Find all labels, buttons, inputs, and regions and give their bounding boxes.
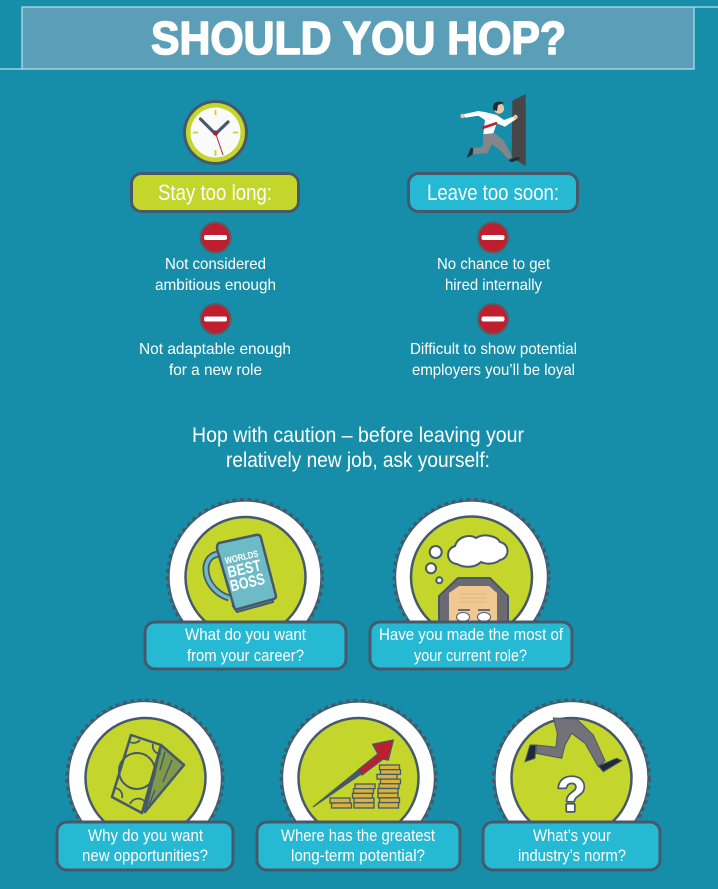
question box: current role: Have you made the most of xyxy=(379,625,563,644)
icon: thought cloud xyxy=(426,535,508,583)
icon: question mark: ? xyxy=(557,769,586,822)
question box: career: What do you want xyxy=(185,625,306,644)
label: stay too long: Stay too long: xyxy=(158,180,272,205)
icon: coin stacks xyxy=(330,765,400,808)
text: no chance: No chance to get xyxy=(437,256,551,273)
text: difficult to show xyxy=(410,341,577,379)
question box: new opportunities: Why do you want xyxy=(88,826,203,845)
heading: hop with caution: relatively new job, ask yourself: xyxy=(226,449,490,472)
icon: minus sign 1 xyxy=(200,222,230,252)
icon: banknotes xyxy=(112,735,184,813)
heading: hop with caution xyxy=(192,424,524,472)
text: no chance xyxy=(437,256,551,294)
icon: thinking head xyxy=(439,578,508,625)
badge: career xyxy=(168,500,322,654)
badge: long-term potential xyxy=(281,700,436,856)
question box: career xyxy=(145,622,346,669)
question box: current role xyxy=(370,622,572,669)
text: difficult to show: employers you’ll be loyal xyxy=(412,362,575,379)
text: no chance: hired internally xyxy=(445,277,542,294)
label: stay too long xyxy=(132,174,298,212)
text: not adaptable: Not adaptable enough xyxy=(139,341,291,358)
icon: rising arrow xyxy=(313,740,393,807)
text: not adaptable: for a new role xyxy=(169,362,262,379)
icon: clock xyxy=(184,102,246,164)
question box: long-term potential xyxy=(257,822,460,870)
badge: industry norm xyxy=(494,700,650,856)
heading: hop with caution: Hop with caution – before leaving your xyxy=(192,424,524,447)
icon: mug: WORLDS xyxy=(224,549,260,567)
question box: current role: your current role? xyxy=(414,646,527,665)
question box: long-term potential: Where has the greatest xyxy=(281,826,435,845)
text: difficult to show: Difficult to show potential xyxy=(410,341,577,358)
badge: new opportunities xyxy=(67,700,223,856)
icon: mug: BEST xyxy=(226,557,263,582)
badge: current role xyxy=(394,500,549,654)
label: leave too soon xyxy=(408,174,578,212)
icon: man running through door xyxy=(460,94,526,166)
icon: mug: BOSS xyxy=(229,571,267,595)
icon: minus sign 4 xyxy=(478,304,508,334)
text: not considered ambitious xyxy=(155,256,276,294)
question box: new opportunities: new opportunities? xyxy=(82,846,208,865)
icon: running legs xyxy=(525,718,622,772)
question box: new opportunities xyxy=(57,822,233,870)
text: not considered ambitious: ambitious enough xyxy=(155,277,276,294)
title banner: SHOULD YOU HOP? xyxy=(151,12,566,64)
question box: career: from your career? xyxy=(187,646,304,665)
title banner xyxy=(0,7,718,69)
text: not adaptable xyxy=(139,341,291,379)
icon: minus sign 2 xyxy=(200,304,230,334)
icon: mug xyxy=(206,535,276,612)
text: not considered ambitious: Not considered xyxy=(165,256,266,273)
question box: long-term potential: long-term potential? xyxy=(291,846,425,865)
question box: industry norm: What’s your xyxy=(533,826,611,845)
icon: minus sign 3 xyxy=(478,222,508,252)
question box: industry norm: industry’s norm? xyxy=(518,846,626,865)
label: leave too soon: Leave too soon: xyxy=(427,180,559,205)
question box: industry norm xyxy=(483,822,660,870)
